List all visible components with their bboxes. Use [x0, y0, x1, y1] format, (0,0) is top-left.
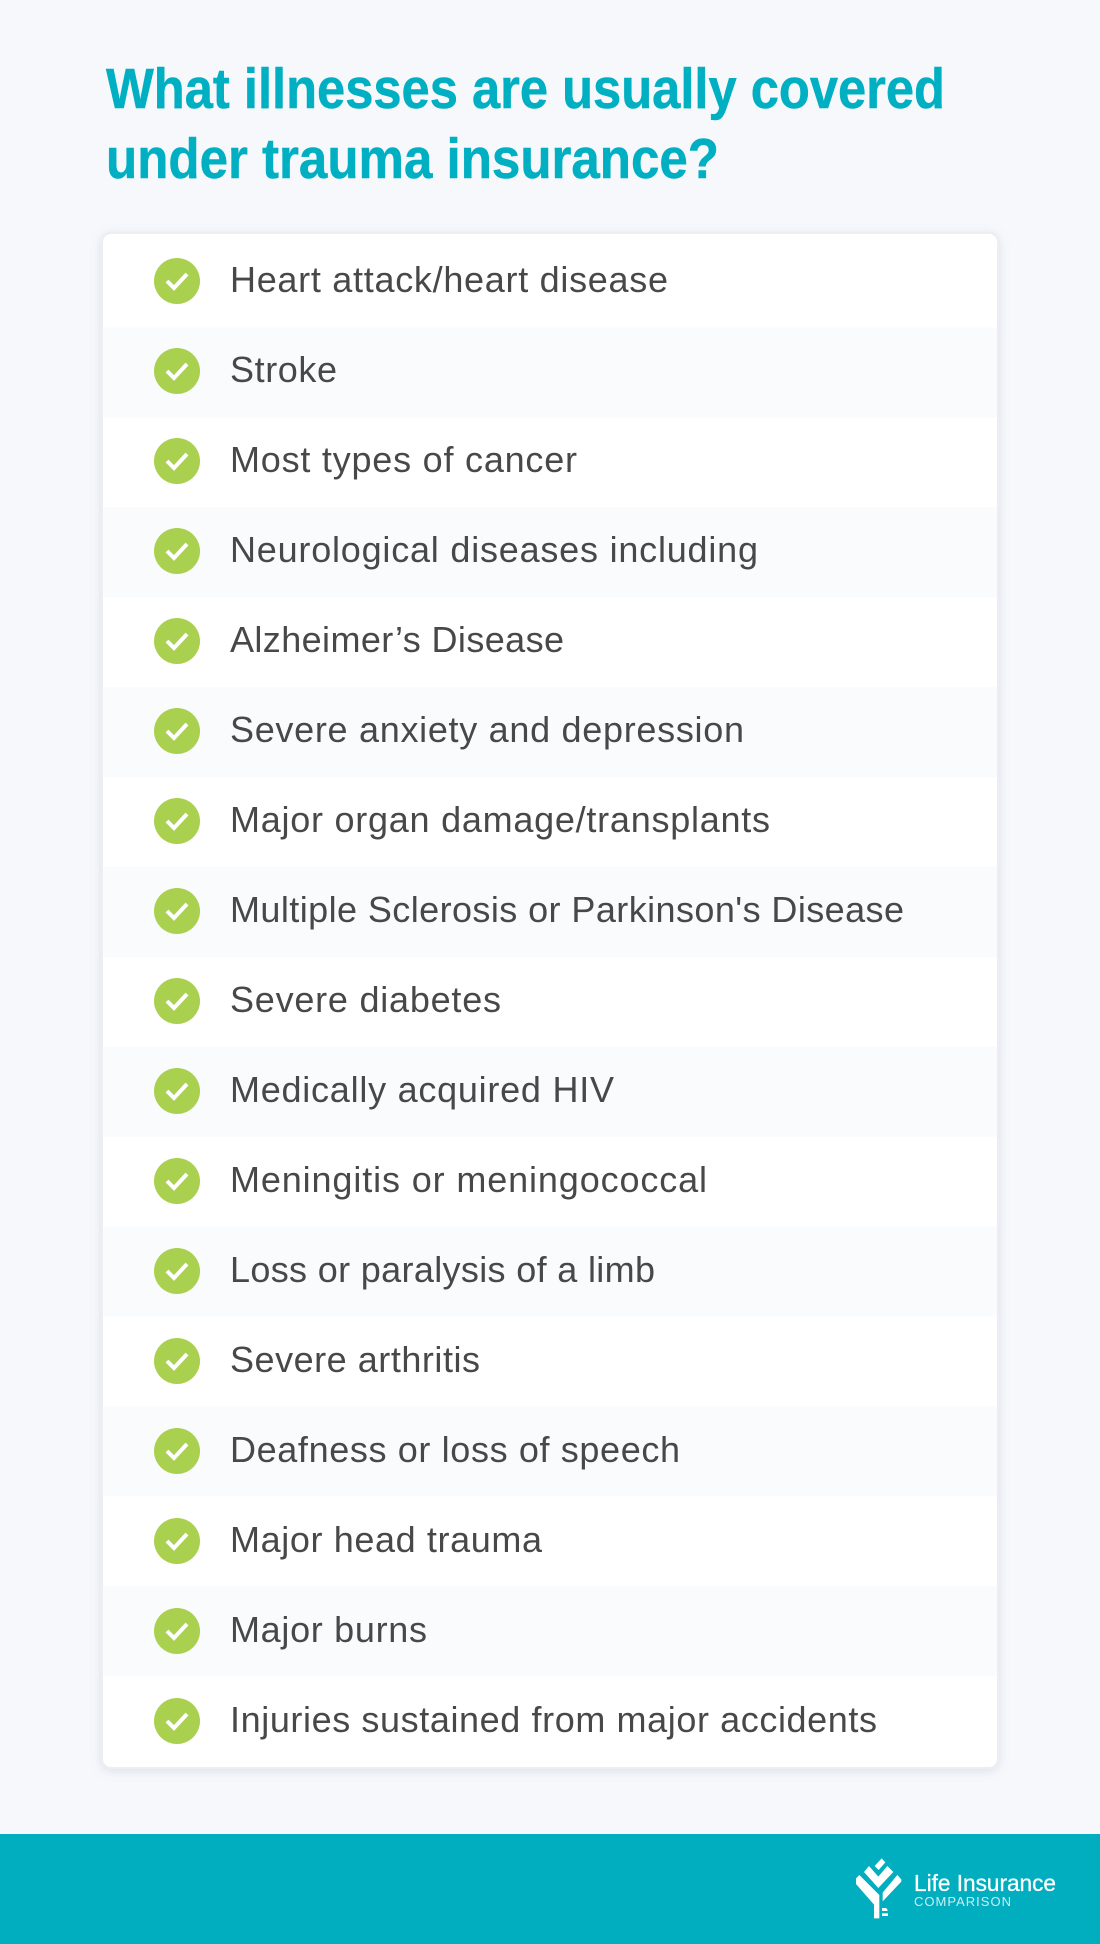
- row: anxiety and depression: Severe anxiety and depression: [230, 709, 744, 750]
- row: burns: Major burns: [230, 1609, 427, 1650]
- logo wordmark: [914, 1870, 1056, 1909]
- row: arthritis: [154, 1338, 480, 1384]
- row: organ damage: Major organ damage/transplants: [230, 799, 770, 840]
- title: What illnesses are usually covered: [106, 57, 945, 121]
- icon: logo tree: [856, 1858, 901, 1918]
- footer band: [0, 1834, 1100, 1944]
- row: stroke: Stroke: [230, 349, 337, 390]
- row: heart attack: Heart attack/heart disease: [230, 259, 668, 300]
- row: deafness: Deafness or loss of speech: [230, 1429, 680, 1470]
- row: diabetes: [154, 978, 501, 1024]
- row: head trauma: Major head trauma: [230, 1519, 543, 1560]
- logo wordmark: Life Insurance: [914, 1870, 1056, 1896]
- row: HIV: Medically acquired HIV: [230, 1069, 614, 1110]
- row: loss of limb: Loss or paralysis of a limb: [230, 1249, 655, 1290]
- logo wordmark: COMPARISON: [914, 1894, 1011, 1909]
- title: [106, 57, 945, 191]
- row: meningitis: Meningitis or meningococcal: [230, 1159, 707, 1200]
- row: alzheimer's: Alzheimer’s Disease: [230, 619, 564, 660]
- panel: illness checklist: [102, 233, 998, 1768]
- row: arthritis: Severe arthritis: [230, 1339, 480, 1380]
- row: neurological diseases: Neurological diseases including: [230, 529, 758, 570]
- row: cancer: Most types of cancer: [230, 439, 577, 480]
- row: burns: [154, 1608, 427, 1654]
- row: MS or Parkinson's: Multiple Sclerosis or Parkinson's Disease: [230, 889, 904, 930]
- title: under trauma insurance?: [106, 127, 719, 191]
- row: major accidents: Injuries sustained from major accidents: [230, 1699, 877, 1740]
- row: stroke: [154, 348, 337, 394]
- row: diabetes: Severe diabetes: [230, 979, 501, 1020]
